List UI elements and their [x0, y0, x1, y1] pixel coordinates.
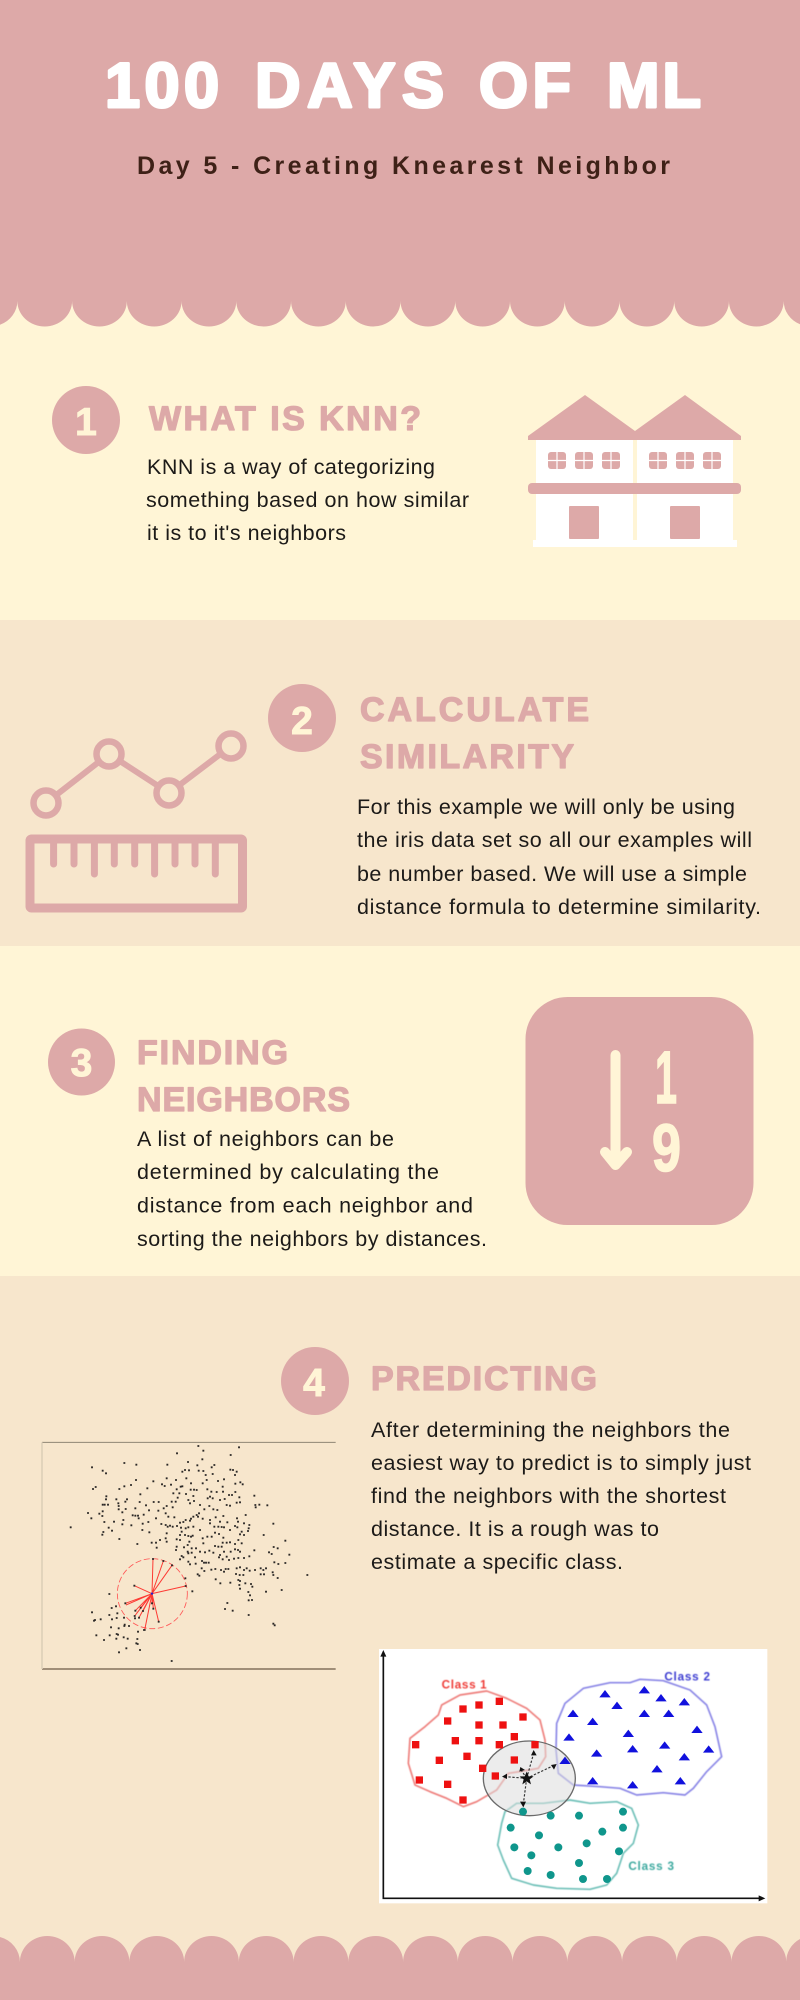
footer scalloped band: [0, 1936, 800, 2000]
text block: KNN definition: something based on how similar: [146, 488, 469, 512]
text block: predicting explanation: distance. It is a rough was to: [371, 1517, 659, 1541]
class 1 region: [408, 1678, 546, 1807]
text block: list of neighbors: sorting the neighbors by distances.: [137, 1227, 487, 1251]
title: DAYS: [255, 51, 444, 121]
neighbourhood ellipse: [483, 1741, 575, 1816]
title: [105, 51, 701, 121]
class 3 region: [498, 1800, 675, 1889]
number badge 2: [268, 684, 336, 752]
class 1 region: Class 1: [442, 1678, 487, 1691]
section 4: predicting: [42, 1347, 767, 1903]
number badge 3: 3: [71, 1042, 92, 1085]
number badge 1: 1: [75, 401, 97, 444]
text block: predicting explanation: easiest way to predict is to simply just: [371, 1451, 751, 1475]
section 3: finding neighbors: [48, 997, 754, 1251]
heading: finding neighbors: NEIGHBORS: [137, 1081, 350, 1119]
heading: what is KNN: WHAT IS KNN?: [149, 400, 421, 438]
icon: sort ascending tile: 1: [655, 1036, 677, 1119]
text block: iris data set: the iris data set so all our examples will: [357, 828, 752, 852]
text block: predicting explanation: After determining the neighbors the: [371, 1418, 730, 1442]
icon: line chart over ruler: [30, 734, 244, 908]
title: 100: [105, 51, 219, 121]
heading: calculate similarity: SIMILARITY: [360, 738, 574, 776]
heading: calculate similarity: [360, 691, 589, 776]
class 1 squares: [412, 1698, 539, 1804]
number badge 1: [52, 386, 120, 454]
section 2: calculate similarity: [30, 684, 761, 919]
chart: KNN classes diagram: [379, 1649, 767, 1903]
text block: list of neighbors: A list of neighbors can be: [137, 1127, 394, 1151]
icon: houses: [528, 395, 741, 547]
number badge 4: [281, 1347, 349, 1415]
text block: list of neighbors: [137, 1127, 487, 1251]
number badge 4: 4: [303, 1362, 325, 1405]
panel: header with scalloped edge: [0, 0, 800, 326]
subtitle: Day 5 - Creating Knearest Neighbor: [137, 152, 670, 180]
panel: section 3 background: [0, 946, 800, 1276]
query star and distance arrows: [502, 1750, 557, 1807]
text block: predicting explanation: [371, 1418, 751, 1574]
text block: iris data set: be number based. We will use a simple: [357, 862, 747, 886]
number badge 2: 2: [291, 700, 313, 743]
text block: predicting explanation: find the neighbors with the shortest: [371, 1484, 726, 1508]
title: ML: [607, 51, 701, 121]
class 3 dots: [507, 1808, 627, 1883]
heading: finding neighbors: FINDING: [137, 1034, 288, 1072]
heading: predicting: PREDICTING: [371, 1360, 597, 1398]
chart: scatter plot with neighbor radius: [42, 1442, 336, 1669]
text block: list of neighbors: determined by calculating the: [137, 1160, 439, 1184]
text block: iris data set: For this example we will only be using: [357, 795, 735, 819]
panel: section 1 background: [0, 290, 800, 620]
text block: iris data set: [357, 795, 761, 919]
title: OF: [479, 51, 571, 121]
heading: finding neighbors: [137, 1034, 350, 1119]
class 2 triangles: [559, 1686, 714, 1788]
text block: predicting explanation: estimate a specific class.: [371, 1550, 623, 1574]
text block: iris data set: distance formula to determine similarity.: [357, 895, 761, 919]
class 2 region: Class 2: [664, 1671, 711, 1684]
icon: sort ascending tile: [526, 997, 754, 1225]
axes: [383, 1653, 762, 1898]
number badge 3: [48, 1028, 115, 1096]
text block: KNN definition: it is to it's neighbors: [147, 521, 346, 545]
text block: list of neighbors: distance from each neighbor and: [137, 1194, 473, 1218]
class 3 region: Class 3: [628, 1860, 675, 1873]
icon: sort ascending tile: 9: [652, 1111, 681, 1186]
section 1: what is KNN: [52, 386, 741, 547]
class 2 region: [556, 1671, 722, 1795]
panel: section 4 background: [0, 1276, 800, 2000]
heading: calculate similarity: CALCULATE: [360, 691, 589, 729]
text block: KNN definition: [146, 455, 469, 545]
text block: KNN definition: KNN is a way of categorizing: [147, 455, 435, 479]
panel: section 2 background: [0, 620, 800, 946]
